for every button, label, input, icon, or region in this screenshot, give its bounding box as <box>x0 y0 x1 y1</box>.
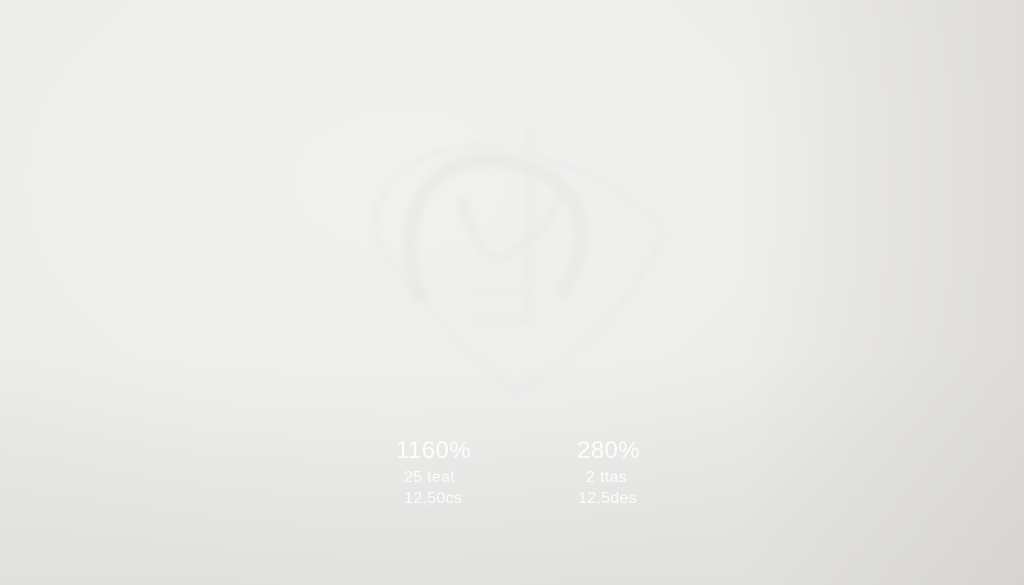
stat label: 2 ttas: 2 ttas <box>586 469 627 486</box>
stat label: 12,5des: 12,5des <box>578 490 637 507</box>
stat: 280%: 280% <box>577 437 640 464</box>
stat: 1160%: 1160% <box>396 437 471 464</box>
stat label: 25 teat: 25 teat <box>404 469 455 486</box>
stat label: 12,50cs: 12,50cs <box>404 490 462 507</box>
